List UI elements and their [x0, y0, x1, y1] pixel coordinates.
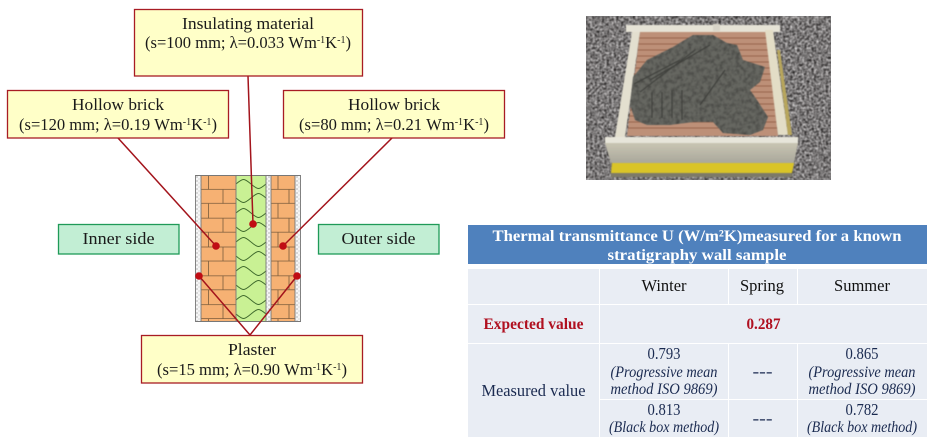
- callout: inner hollow brick: ): [211, 115, 217, 134]
- callout: insulating material: -1: [337, 35, 345, 46]
- measured value rows: [468, 344, 927, 437]
- measured value rows: method ISO 9869): [610, 381, 718, 398]
- layer: outer hollow brick: [271, 175, 295, 322]
- label: inner side: Inner side: [82, 229, 154, 248]
- expected value row: [468, 305, 927, 343]
- callout: outer hollow brick: Hollow brick: [348, 95, 441, 114]
- measured value rows: ---: [752, 362, 772, 381]
- callout: insulating material: ): [345, 33, 351, 52]
- measured value rows: 0.865: [846, 344, 878, 363]
- measured value rows: (Black box method): [609, 419, 719, 436]
- expected value row: 0.287: [746, 316, 780, 333]
- callout: insulating material: -1: [317, 35, 325, 46]
- wooden frame: [626, 25, 780, 32]
- measured value rows: (Progressive mean: [610, 364, 718, 381]
- mortar layer: [630, 35, 768, 135]
- wall outline: [196, 175, 300, 322]
- measured value rows: (Black box method): [807, 419, 917, 436]
- callout: outer hollow brick: (s=80 mm; λ=0.21 Wm: [299, 115, 454, 134]
- wall cross-section diagram: [195, 175, 301, 322]
- table title bar: stratigraphy wall sample: [608, 247, 786, 264]
- layer: inner plaster: [195, 175, 201, 322]
- measured value rows: 0.813: [648, 400, 680, 419]
- layer: inner hollow brick: [201, 175, 236, 322]
- callout: inner hollow brick: -1: [183, 117, 191, 128]
- table header row: Summer: [834, 276, 890, 295]
- callout: insulating material: K: [325, 33, 337, 52]
- label: outer side: Outer side: [342, 229, 416, 248]
- callout: insulating material: Insulating material: [182, 14, 314, 33]
- photo: wall sample with mortar in wooden frame: [586, 16, 831, 180]
- brick surface: [627, 32, 778, 136]
- callout: plaster: -1: [333, 362, 341, 373]
- callout: inner hollow brick: K: [191, 115, 203, 134]
- yellow base strip: [611, 163, 794, 173]
- callout: outer hollow brick: ): [483, 115, 489, 134]
- table header row: Winter: [642, 276, 687, 295]
- callout: plaster: [142, 336, 362, 383]
- table title bar: [468, 225, 927, 264]
- callout: outer hollow brick: -1: [475, 117, 483, 128]
- callout: plaster: ): [341, 360, 347, 379]
- callout: inner hollow brick: (s=120 mm; λ=0.19 Wm: [19, 115, 182, 134]
- callout: plaster: Plaster: [228, 340, 277, 359]
- measured value rows: ---: [752, 409, 772, 428]
- label: outer side: [318, 224, 439, 254]
- callout: plaster: (s=15 mm; λ=0.90 Wm: [157, 360, 312, 379]
- callout: inner hollow brick: -1: [203, 117, 211, 128]
- measured value rows: (Progressive mean: [808, 364, 916, 381]
- callout: insulating material: [134, 10, 362, 76]
- table header row: [468, 269, 927, 304]
- table title bar: Thermal transmittance U (W/m²K)measured for a known: [492, 228, 902, 245]
- callout: inner hollow brick: Hollow brick: [72, 95, 165, 114]
- layer: outer plaster: [295, 175, 301, 322]
- leader lines and markers: [118, 76, 392, 335]
- table: thermal transmittance values: [468, 269, 927, 437]
- callout: plaster: -1: [313, 362, 321, 373]
- table header row: Spring: [740, 276, 784, 295]
- callout: plaster: K: [321, 360, 333, 379]
- measured value rows: Measured value: [482, 381, 586, 400]
- measured value rows: method ISO 9869): [808, 381, 916, 398]
- callout: inner hollow brick: [8, 90, 228, 138]
- measured value rows: 0.782: [846, 400, 878, 419]
- callout: insulating material: (s=100 mm; λ=0.033 Wm: [145, 33, 316, 52]
- label: inner side: [58, 224, 179, 254]
- callout: outer hollow brick: [284, 90, 504, 138]
- callout: outer hollow brick: K: [463, 115, 475, 134]
- callout: outer hollow brick: -1: [455, 117, 463, 128]
- layer: air gap: [266, 175, 271, 322]
- layer: insulating material: [236, 175, 266, 322]
- expected value row: Expected value: [484, 316, 584, 333]
- measured value rows: 0.793: [648, 344, 680, 363]
